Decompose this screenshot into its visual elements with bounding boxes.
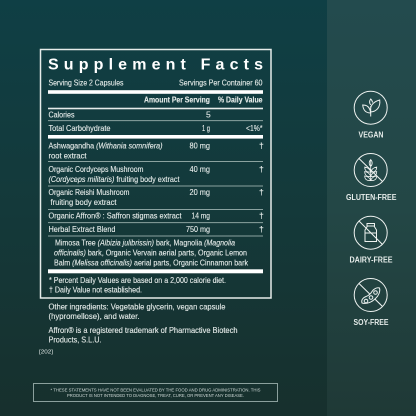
row: herbal extract blend: † [259,224,264,234]
row: affron: † [259,210,264,220]
row: reishi: 20 mg [190,187,210,197]
panel: supplement facts [40,50,271,298]
footnotes [49,275,226,294]
serving row [48,78,263,88]
other ingredients [48,302,226,321]
row: reishi: Organic Reishi Mushroom [48,187,130,197]
row: cordyceps: † [259,164,264,174]
trademark note: Affron® is a registered trademark of Pharmactive Biotech [48,325,238,335]
row: calories: Calories [48,110,74,120]
disclaimer box [34,384,278,402]
label: vegan: VEGAN [358,130,384,140]
blend ingredients: Balm (Melissa officinalis) aerial parts, Organic Cinnamon bark [54,258,249,268]
other ingredients: (hypromellose), and water. [48,311,140,321]
label: gluten-free: GLUTEN-FREE [346,193,397,202]
panel: icon column [327,0,416,416]
other ingredients: Other ingredients: Vegetable glycerin, vegan capsule [48,302,226,312]
row: cordyceps: 40 mg [190,164,210,174]
row: herbal extract blend [48,224,264,234]
row: calories: 5 [206,110,211,120]
row: reishi: † [259,187,264,197]
icon: vegan [354,91,387,124]
row: affron: Organic Affron® : Saffron stigmas extract [48,210,182,220]
trademark note: Products, S.L.U. [48,334,102,344]
row: herbal extract blend: 750 mg [186,224,210,234]
row: cordyceps: Organic Cordyceps Mushroom [48,164,144,174]
row: total carbohydrate: <1%* [246,123,263,133]
row: affron: 14 mg [192,210,210,220]
row: cordyceps [48,164,264,184]
row: cordyceps: (Cordyceps militaris) fruiting body extract [48,174,180,184]
row: ashwagandha: Ashwagandha (Withania somnifera) [48,140,163,150]
row: total carbohydrate [48,123,263,133]
disclaimer box: PRODUCT IS NOT INTENDED TO DIAGNOSE, TREAT, CURE, OR PREVENT ANY DISEASE. [67,393,244,398]
row: total carbohydrate: Total Carbohydrate [48,123,111,133]
trademark note [48,325,238,344]
row: ashwagandha: 80 mg [190,140,210,150]
row: ashwagandha: root extract [48,150,87,160]
label: soy-free: SOY-FREE [354,318,389,327]
column headers: % Daily Value [218,94,263,104]
footnotes: * Percent Daily Values are based on a 2,000 calorie diet. [49,275,226,285]
blend ingredients: officinalis) bark, Organic Vervain aerial parts, Organic Lemon [54,248,247,258]
row: ashwagandha: † [259,140,264,150]
panel: background [0,0,327,416]
column headers: Amount Per Serving [144,94,210,104]
icon: dairy-free [354,216,387,249]
row: herbal extract blend: Herbal Extract Blend [48,224,116,234]
icon: gluten-free [354,154,387,186]
batch code: [202] [39,350,54,356]
serving row: Serving Size 2 Capsules [48,78,124,88]
column headers [144,94,263,104]
icon: soy-free [354,278,387,312]
row: calories [48,110,211,120]
blend ingredients: Mimosa Tree (Albizia julibrissin) bark, Magnolia (Magnolia [55,238,235,248]
row: reishi: fruiting body extract [50,197,117,207]
disclaimer box: * THESE STATEMENTS HAVE NOT BEEN EVALUATED BY THE FOOD AND DRUG ADMINISTRATION. THIS [50,388,261,392]
row: ashwagandha [48,140,264,160]
footnotes: † Daily Value not established. [49,284,142,294]
row: reishi [48,187,264,207]
heading: Supplement Facts [48,56,263,74]
row: total carbohydrate: 1 g [202,123,210,133]
label: dairy-free: DAIRY-FREE [350,256,393,264]
blend ingredients [54,238,249,268]
serving row: Servings Per Container 60 [179,78,263,88]
